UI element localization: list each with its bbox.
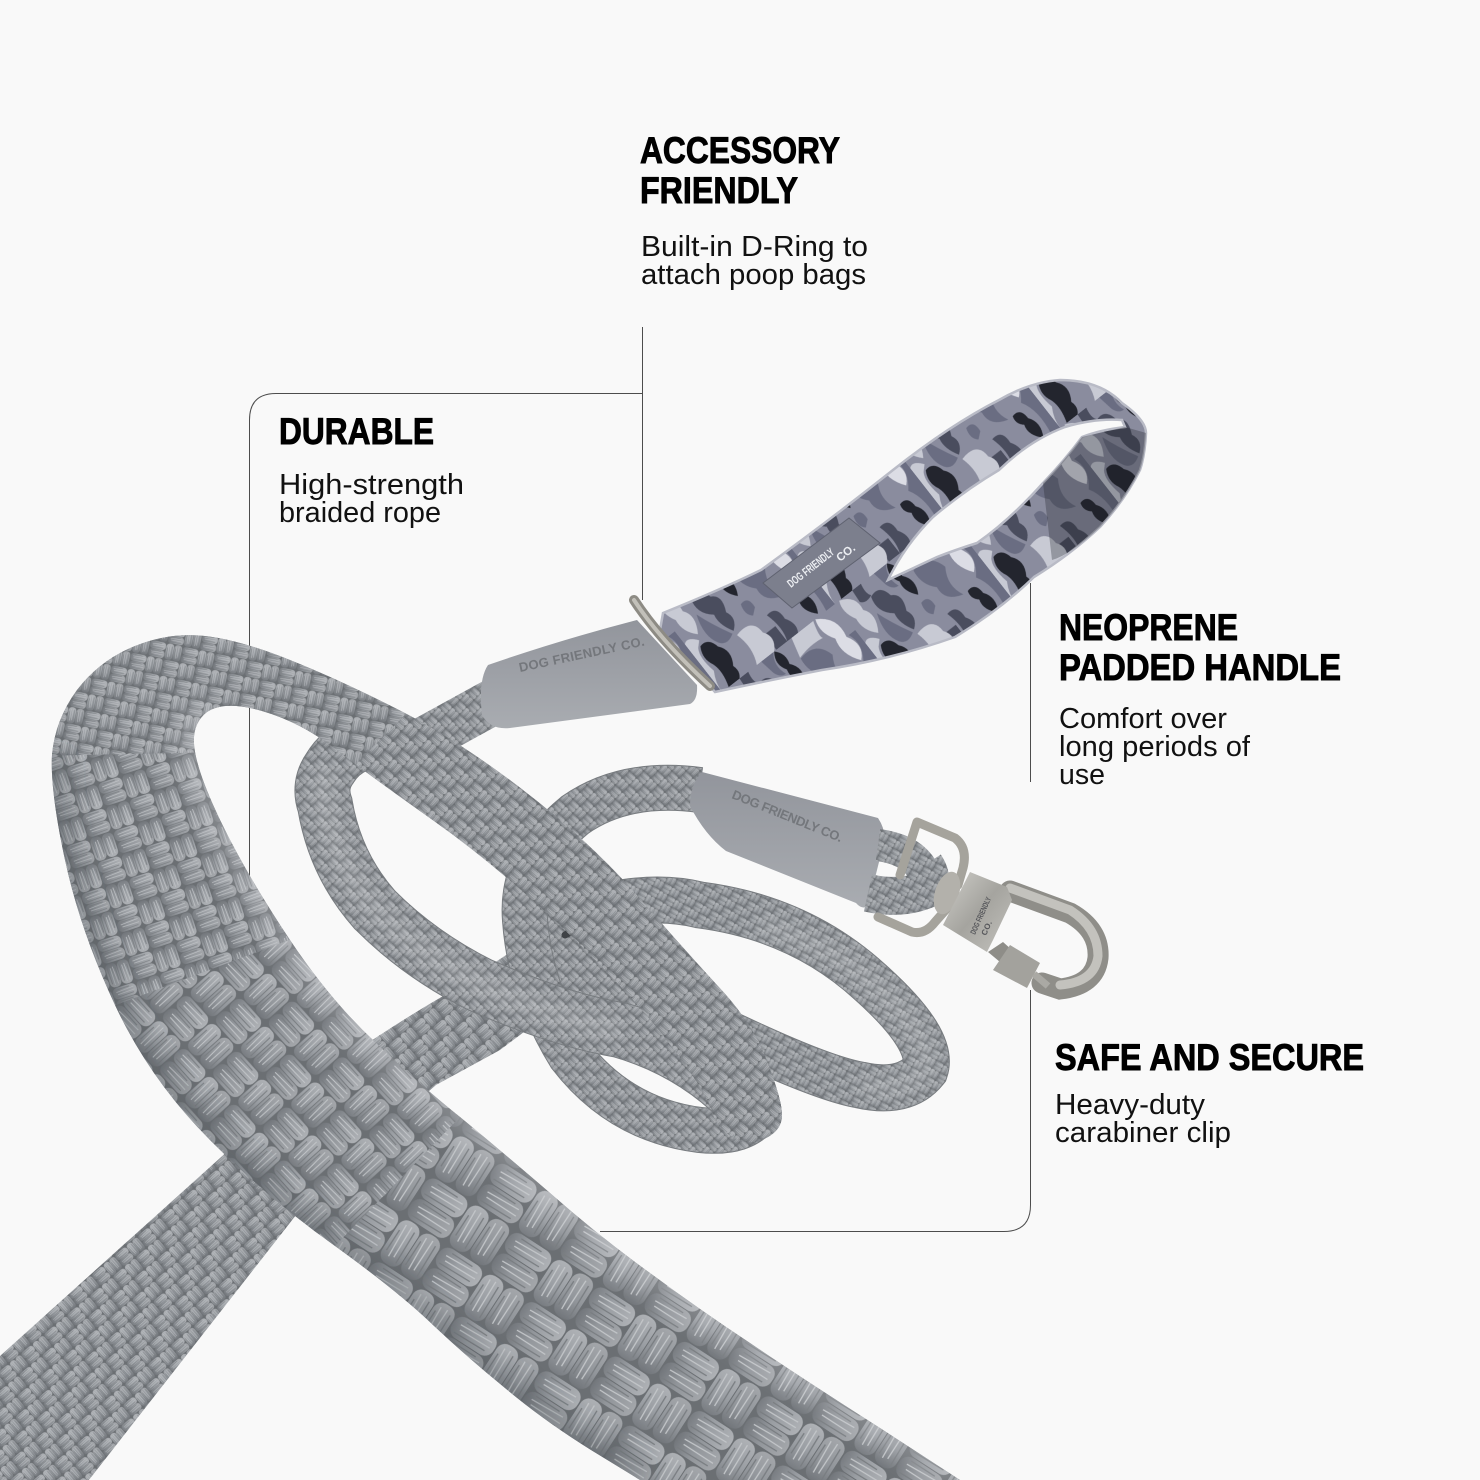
feature: safe and secure: carabiner clip (1055, 1117, 1231, 1149)
rope: left loop crossing strand (322, 739, 740, 1100)
handle ferrule with embossed logo (481, 620, 697, 728)
rope: lower left strand and right loop (0, 880, 926, 1480)
leash illustration (0, 380, 1146, 1480)
feature: neoprene padded handle: NEOPRENE (1059, 607, 1238, 648)
D-ring (634, 600, 710, 686)
handle label tag: DOG FRIENDLY (785, 546, 837, 590)
feature: durable: DURABLE (279, 411, 434, 452)
feature: neoprene padded handle (1059, 607, 1341, 791)
handle label tag (763, 518, 880, 608)
rope stub at handle ferrule (420, 698, 500, 742)
feature: neoprene padded handle: long periods of (1059, 731, 1251, 763)
feature: neoprene padded handle: Comfort over (1059, 703, 1227, 735)
feature: neoprene padded handle: use (1059, 759, 1105, 791)
carabiner clip and swivel (868, 822, 1098, 989)
feature: neoprene padded handle: PADDED HANDLE (1059, 647, 1341, 688)
feature: accessory friendly (640, 130, 868, 291)
lead ferrule with embossed logo: DOG FRIENDLY CO. (730, 787, 845, 845)
feature: durable (279, 411, 464, 529)
feature: durable: braided rope (279, 497, 441, 529)
feature: accessory friendly: FRIENDLY (640, 170, 798, 211)
lead ferrule with embossed logo (690, 772, 884, 907)
callout lines connecting text to the leash (250, 327, 1030, 1232)
feature: safe and secure: SAFE AND SECURE (1055, 1037, 1364, 1078)
feature: durable: High-strength (279, 469, 464, 501)
handle ferrule with embossed logo: DOG FRIENDLY CO. (518, 634, 646, 675)
feature: safe and secure: Heavy-duty (1055, 1089, 1206, 1121)
neoprene camo handle (660, 380, 1146, 692)
carabiner clip and swivel: DOG FRIENDLY (969, 895, 993, 936)
feature: safe and secure (1055, 1037, 1364, 1149)
feature: accessory friendly: Built-in D-Ring to (641, 231, 868, 263)
feature: accessory friendly: ACCESSORY (640, 130, 840, 171)
rope: inner loop (525, 788, 760, 1131)
handle label tag: CO. (834, 542, 858, 564)
main braided rope, thick foreground sweep (52, 635, 960, 1480)
carabiner clip and swivel: CO. (980, 919, 994, 937)
feature: accessory friendly: attach poop bags (641, 259, 866, 291)
